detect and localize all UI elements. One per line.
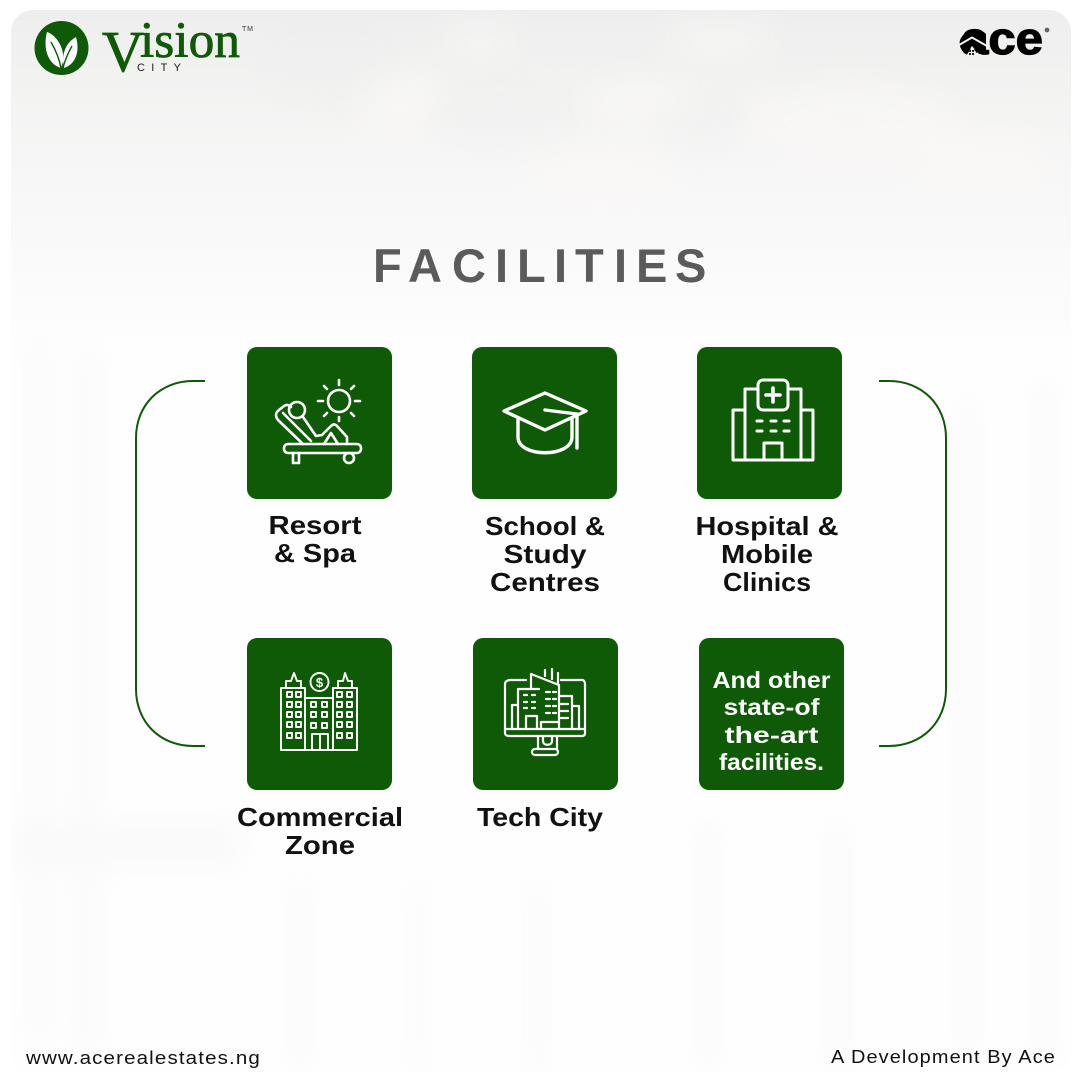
icon: dollar sign: $	[316, 675, 324, 690]
label: Tech City: Tech City	[477, 802, 604, 832]
registered mark	[1045, 28, 1049, 32]
icon: roof mark	[959, 30, 987, 56]
card: Commercial Zone	[247, 638, 392, 790]
card text: And other	[712, 667, 831, 693]
card text: state-of	[724, 694, 820, 720]
card text: facilities.	[719, 749, 824, 775]
card: Tech City	[473, 638, 618, 790]
wordmark: ision	[140, 13, 240, 69]
card: Resort & Spa	[247, 347, 392, 499]
left bracket	[136, 381, 205, 746]
card: other facilities	[699, 638, 844, 790]
wordmark: ace	[961, 13, 1043, 64]
label: Commercial Zone: Zone	[285, 830, 355, 860]
right bracket	[879, 381, 946, 746]
icon: commercial buildings	[281, 673, 357, 750]
card text: the-art	[724, 722, 819, 748]
label: Hospital & Mobile Clinics: Hospital &	[696, 511, 838, 541]
icon: sun lounger	[276, 380, 361, 463]
wordmark: V	[102, 19, 144, 84]
label: School & Study Centres: Centres	[490, 567, 600, 597]
label: School & Study Centres: School &	[485, 511, 605, 541]
label: Resort & Spa: Resort	[268, 510, 362, 540]
label: School & Study Centres: Study	[504, 539, 587, 569]
background panel	[11, 10, 1071, 208]
logo: Vision City	[34, 13, 253, 84]
icon: hospital	[733, 380, 813, 460]
label: Hospital & Mobile Clinics: Mobile	[721, 539, 813, 569]
card: School & Study Centres	[472, 347, 617, 499]
trademark: TM	[242, 26, 253, 33]
footer: developer credit: A Development By Ace	[831, 1047, 1056, 1067]
logo: ace	[959, 13, 1049, 64]
label: Resort & Spa: & Spa	[274, 538, 357, 568]
footer: website: www.acerealestates.ng	[25, 1048, 261, 1068]
card: Hospital & Mobile Clinics	[697, 347, 842, 499]
icon: city on monitor	[505, 669, 585, 755]
title: FACILITIES	[373, 239, 706, 292]
label: Commercial Zone: Commercial	[237, 802, 403, 832]
icon: leaf badge	[34, 21, 88, 75]
wordmark subtitle: CITY	[137, 62, 182, 74]
icon: graduation cap	[504, 393, 586, 453]
label: Hospital & Mobile Clinics: Clinics	[723, 567, 811, 597]
